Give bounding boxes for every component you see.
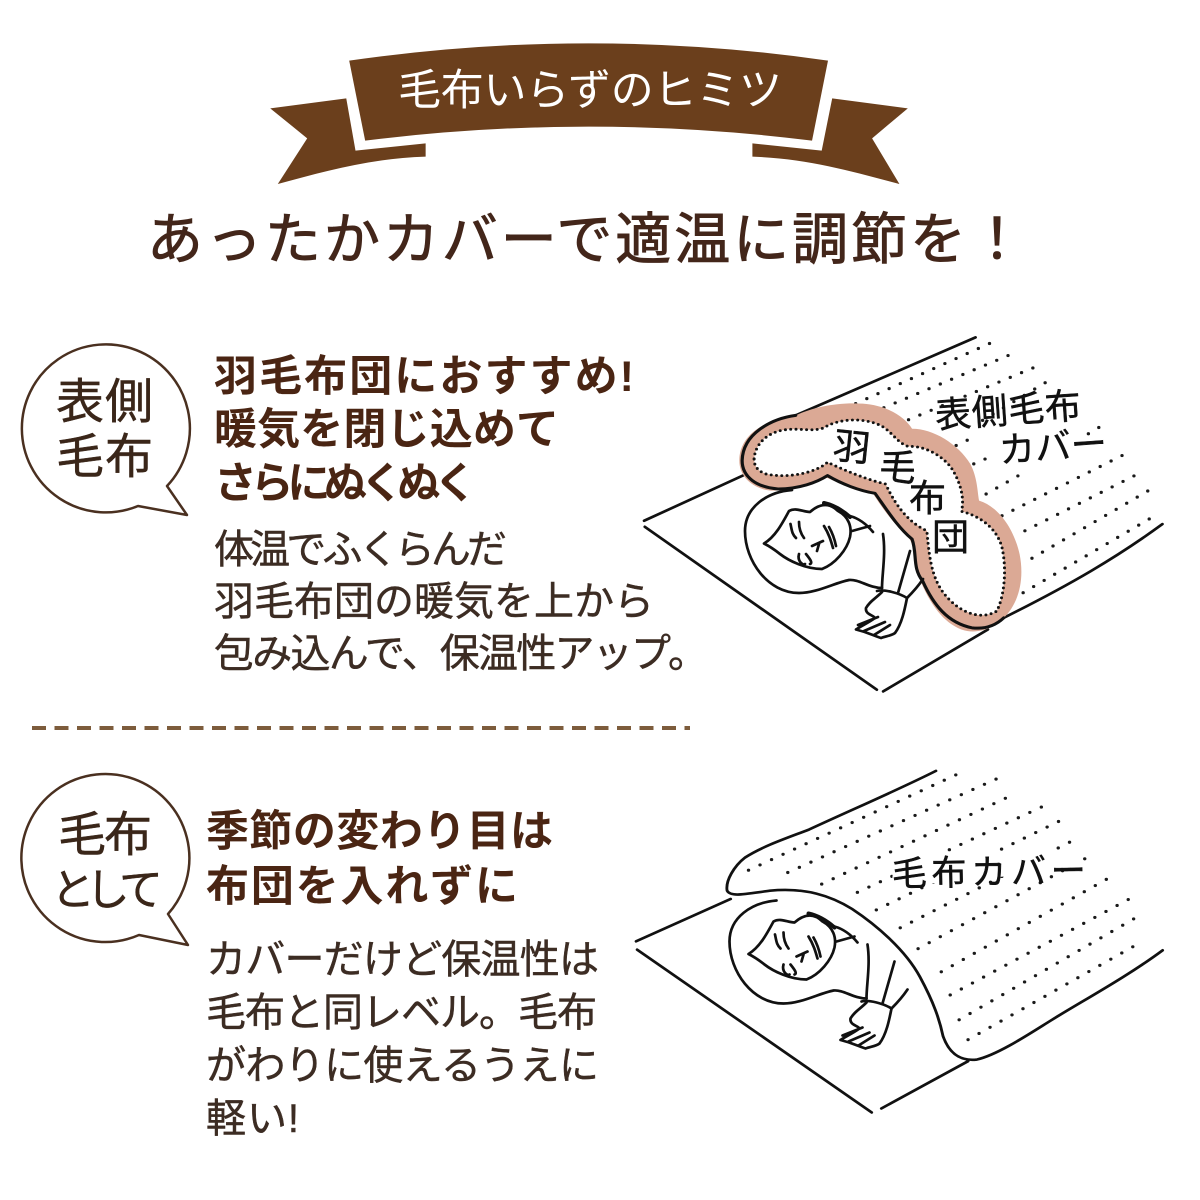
heading: section 2: 布団を入れずに — [206, 863, 518, 911]
body text: section 2: 毛布と同レベル。毛布 — [206, 991, 597, 1035]
label: 毛布カバー: 毛布カバー — [891, 843, 1086, 897]
illustration: sleeper under down duvet with cover on top — [644, 337, 1162, 691]
speech bubble: 表側毛布 — [22, 344, 190, 515]
dashed divider — [32, 726, 690, 730]
label: カバー: カバー — [997, 415, 1109, 474]
body text: section 2: がわりに使えるうえに — [206, 1044, 599, 1088]
label: 羽毛布団: 毛 — [877, 444, 919, 490]
label: 羽毛布団: 団 — [932, 517, 969, 558]
label: 羽毛布団 — [831, 425, 969, 558]
ribbon banner — [270, 43, 908, 184]
heading: section 1 — [214, 353, 634, 508]
speech bubble: 毛布として — [21, 774, 189, 945]
heading: section 1: さらにぬくぬく — [214, 460, 477, 508]
speech bubble: 毛布として: 毛布 — [58, 809, 152, 862]
body text: section 1: 羽毛布団の暖気を上から — [214, 580, 654, 624]
icon: sleeping person — [730, 900, 908, 1048]
body text: section 1 — [214, 528, 708, 676]
illustration: sleeper under blanket cover — [636, 771, 1163, 1112]
label: 羽毛布団: 布 — [909, 478, 946, 519]
label: 羽毛布団: 羽 — [831, 425, 872, 470]
body text: section 1: 体温でふくらんだ — [214, 528, 507, 572]
heading: section 2 — [206, 808, 553, 911]
heading: section 1: 羽毛布団におすすめ! — [214, 353, 634, 401]
icon: sleeping person — [745, 490, 923, 638]
speech bubble: 表側毛布: 表側 — [56, 376, 153, 429]
speech bubble: 表側毛布: 毛布 — [56, 431, 153, 484]
speech bubble: 毛布として: として — [51, 866, 163, 915]
heading: section 2: 季節の変わり目は — [206, 808, 553, 856]
label: 表側毛布カバー: 表側毛布 — [933, 377, 1082, 439]
body text: section 2: カバーだけど保温性は — [206, 938, 599, 982]
title: あったかカバーで適温に調節を！ — [147, 208, 1025, 271]
body text: section 2 — [206, 938, 599, 1141]
body text: section 1: 包み込んで、保温性アップ。 — [214, 632, 708, 676]
ribbon banner: 毛布いらずのヒミツ — [398, 67, 782, 115]
heading: section 1: 暖気を閉じ込めて — [214, 406, 559, 454]
body text: section 2: 軽い! — [206, 1097, 299, 1141]
